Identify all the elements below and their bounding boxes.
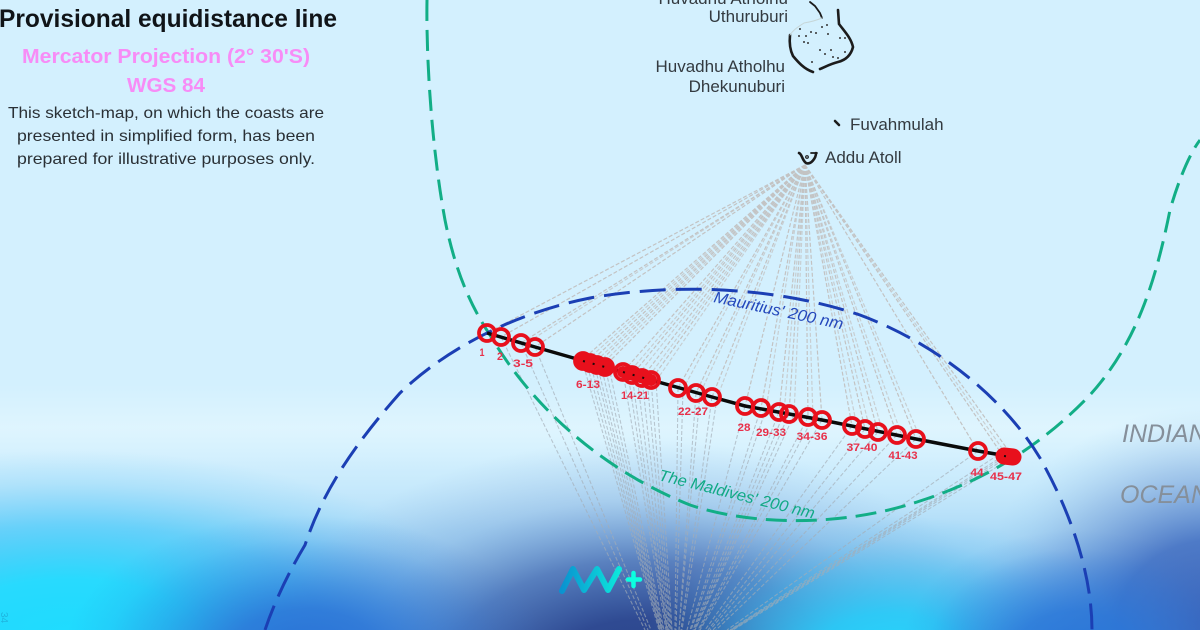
marker number labels: 34-36 [796,431,828,443]
ocean label [1120,420,1200,509]
place names: Dhekunuburi [689,77,785,96]
Maldives 200 nm boundary [427,0,1200,521]
marker number labels: 6-13 [576,379,600,391]
projection subtitle: WGS 84 [127,75,206,97]
marker number labels: 45-47 [990,471,1022,483]
marker number labels: 14-21 [621,390,649,402]
marker number labels: 2 [497,351,503,363]
sight lines to the southern coast [501,337,1013,630]
disclaimer note: prepared for illustrative purposes only. [17,151,315,168]
title: Provisional equidistance line [0,5,337,33]
projection subtitle [22,46,310,97]
marker number labels: 28 [738,422,750,434]
marker number labels: 1 [480,347,484,359]
place names: Fuvahmulah [850,115,944,134]
place names [656,0,944,167]
place names: Addu Atoll [825,148,902,167]
icon: Fuvahmulah island [835,121,839,125]
label: Mauritius 200 nm: Mauritius' 200 nm [712,289,845,333]
projection subtitle: Mercator Projection (2° 30'S) [22,46,310,68]
disclaimer note: presented in simplified form, has been [17,128,315,145]
icon: Huvadhu atoll [790,2,853,72]
provisional equidistance line [487,333,1013,457]
marker number labels: 29-33 [756,427,786,439]
disclaimer note: This sketch-map, on which the coasts are [8,105,324,122]
marker number labels: 37-40 [846,442,878,454]
marker number labels: 22-27 [678,406,708,418]
marker number labels: 44 [970,467,984,479]
place names: Uthuruburi [709,7,788,26]
place names: Huvadhu Atholhu [656,57,785,76]
icon: Addu Atoll [799,153,817,163]
sight lines from Addu Atoll [487,165,1013,457]
marker number labels [480,347,1022,483]
marker number labels: 3-5 [513,358,533,370]
Mauritius 200 nm boundary [265,289,1092,630]
marker number labels: 41-43 [888,450,918,462]
label: Maldives 200 nm: The Maldives' 200 nm [657,467,816,523]
turning point markers [479,325,1013,459]
logo [562,569,640,591]
bottom colour wash [0,380,1200,630]
disclaimer note [8,105,324,168]
